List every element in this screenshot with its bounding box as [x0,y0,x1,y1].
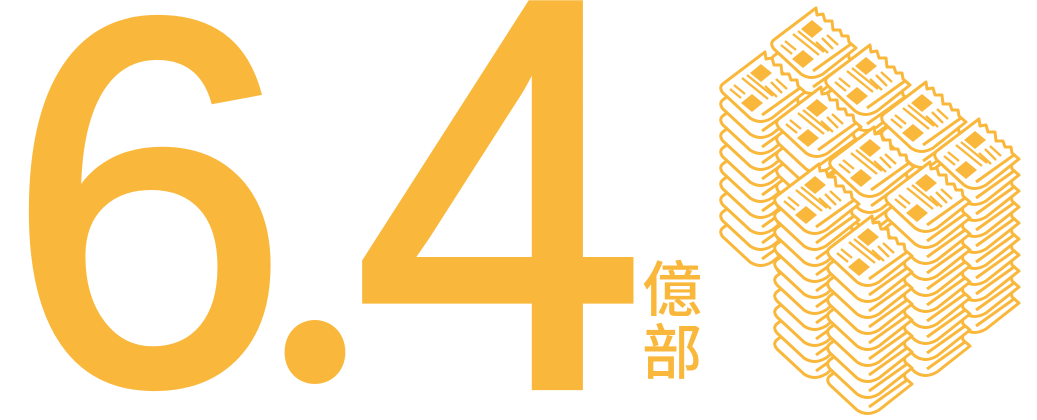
newspaper stack 2 [826,45,910,258]
newspaper stack 10 [828,216,912,414]
newspaper stack 6 [935,119,1019,332]
newspaper stack 8 [886,162,970,376]
character 億: 億 [642,257,702,324]
newspaper stack 5 [777,87,861,300]
newspaper stack 1 [772,8,856,222]
newspaper stack 3 [721,52,805,266]
unit label 億部 [642,257,702,387]
newspaper stack 7 [830,127,914,340]
icon: stacks of newspapers [721,8,1019,414]
big number 6.4 [7,0,645,420]
newspaper stack 4 [882,82,966,296]
newspaper stack 9 [775,164,859,378]
character 部: 部 [642,320,702,387]
